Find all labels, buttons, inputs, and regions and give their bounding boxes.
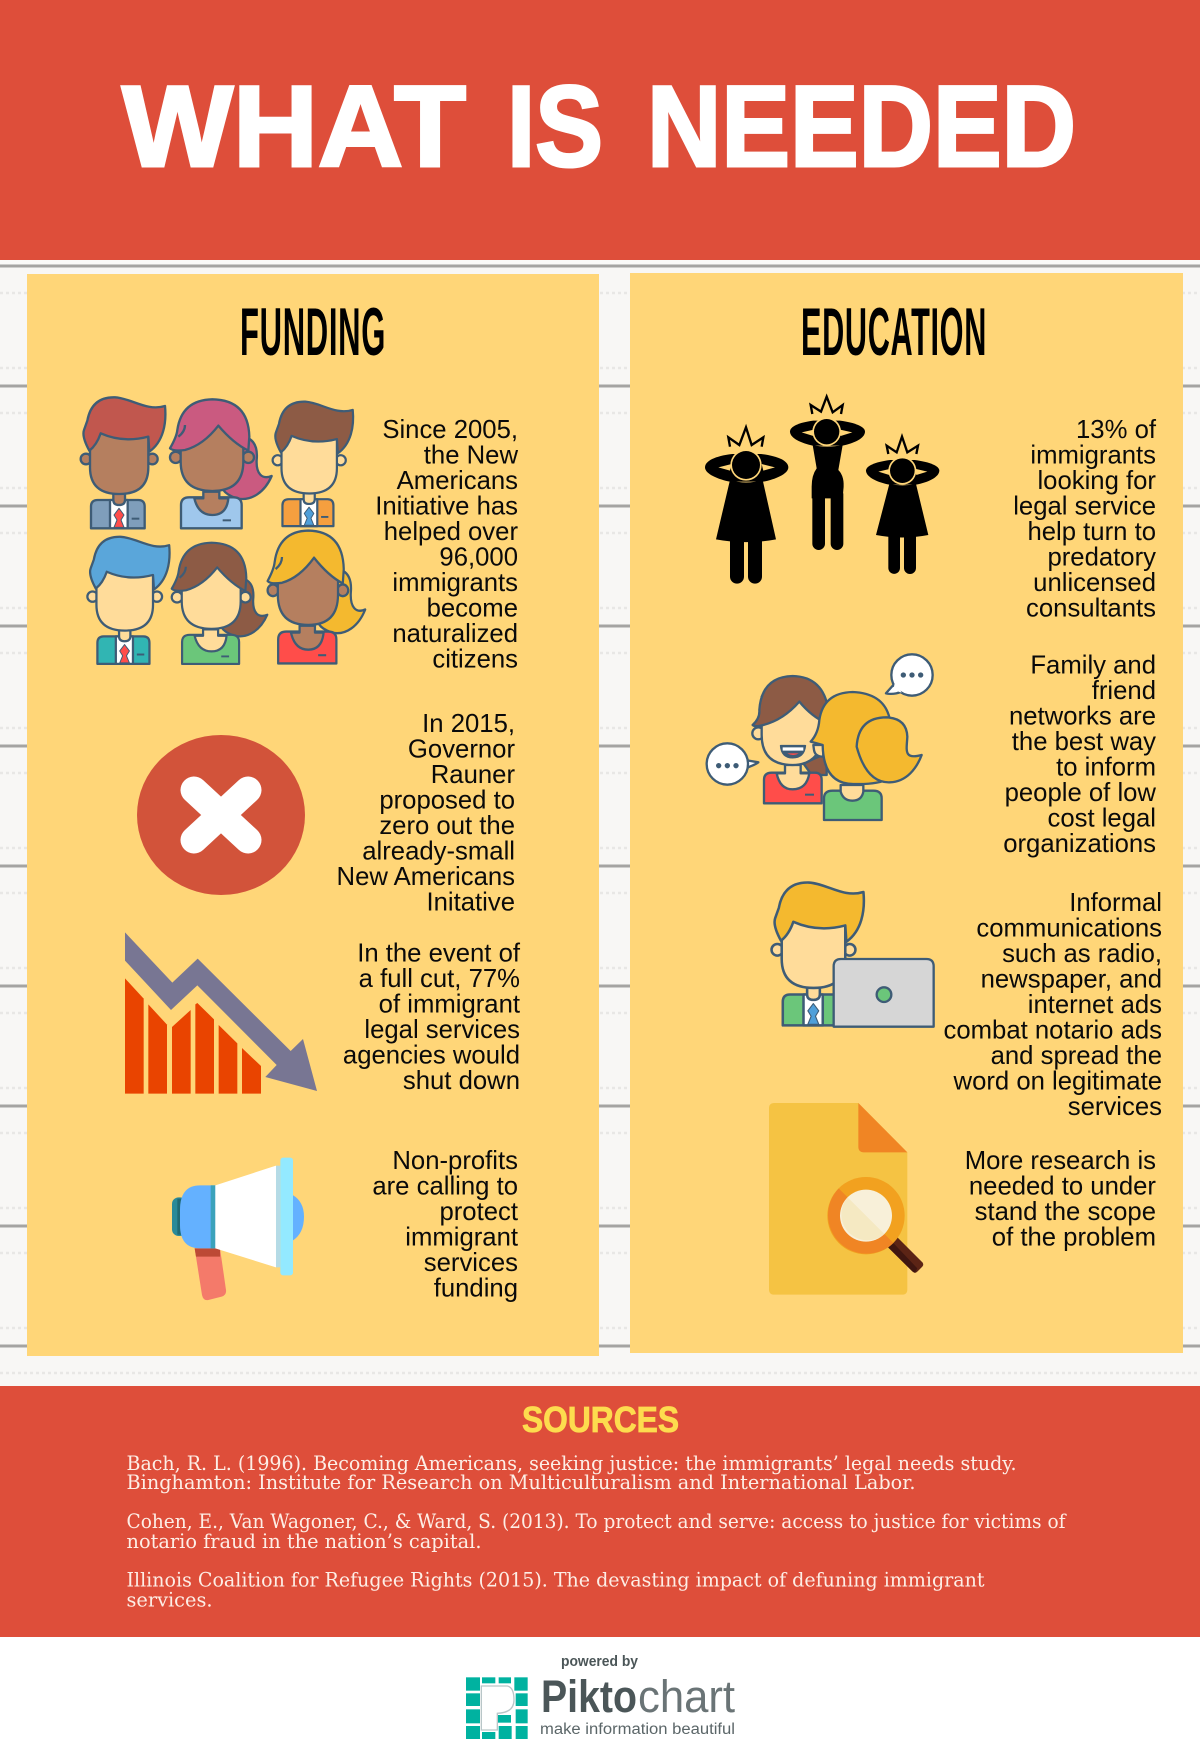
icon: document with magnifying glass — [769, 1103, 923, 1295]
text: non-profits: Non-profits — [392, 1147, 518, 1175]
text: non-profits: protect — [439, 1198, 518, 1226]
text: governor proposal: zero out the — [379, 812, 515, 840]
text: predatory consultants: unlicensed — [1033, 569, 1156, 597]
icon: group of six people — [81, 397, 365, 664]
laptop — [834, 959, 934, 1027]
source: Bach: Binghamton: Institute for Research on Multiculturalism and International Labor. — [126, 1470, 916, 1494]
text: governor proposal: proposed to — [379, 786, 515, 814]
figure: right woman — [866, 437, 939, 574]
text: full cut: shut down — [403, 1067, 520, 1095]
person: woman with brown hair — [172, 543, 267, 664]
panel: funding: FUNDING — [240, 294, 386, 370]
text: predatory consultants: help turn to — [1027, 518, 1156, 546]
text: predatory consultants: consultants — [1026, 594, 1156, 622]
text: naturalized citizens: citizens — [432, 646, 518, 674]
text: naturalized citizens: 96,000 — [439, 544, 518, 572]
footer: powered by piktochart — [0, 1637, 1200, 1757]
logo wordmark: make information beautiful — [540, 1721, 735, 1738]
figure: middle man — [790, 397, 865, 550]
text: predatory consultants: predatory — [1047, 544, 1156, 572]
text: non-profits: immigrant — [405, 1224, 518, 1252]
source: Illinois Coalition: Illinois Coalition for Refugee Rights (2015). The devasting impact of defuning immigrant — [126, 1568, 984, 1592]
text: naturalized citizens: Since 2005, — [382, 416, 518, 444]
text: full cut: a full cut, 77% — [359, 965, 520, 993]
text: governor proposal: already-small — [362, 838, 515, 866]
source: Cohen: Cohen, E., Van Wagoner, C., & Ward, S. (2013). To protect and serve: access to justice for victims of — [126, 1509, 1067, 1533]
text: more research: stand the scope — [975, 1198, 1156, 1226]
source: Bach — [126, 1451, 1016, 1494]
icon: three stressed figures — [705, 397, 939, 584]
source: Illinois Coalition: services. — [126, 1588, 212, 1612]
figure: left woman — [705, 427, 788, 584]
person: laughing woman — [752, 676, 828, 803]
person: man with blue hair — [87, 537, 170, 664]
text: governor proposal: New Americans — [337, 863, 515, 891]
header banner — [0, 0, 1200, 264]
text: informal communications: services — [1068, 1093, 1162, 1121]
text: informal communications: newspaper, and — [981, 966, 1162, 994]
panel: funding — [27, 274, 599, 1356]
person: man with red hair — [81, 397, 165, 528]
text: informal communications: Informal — [1069, 889, 1162, 917]
logo mark — [466, 1677, 528, 1739]
text: informal communications: and spread the — [991, 1042, 1162, 1070]
panel: education — [630, 273, 1183, 1353]
text: family and friend networks: networks are — [1009, 702, 1156, 730]
logo wordmark: Pikto — [541, 1671, 637, 1722]
text: informal communications: internet ads — [1028, 991, 1162, 1019]
text: informal communications: combat notario ads — [944, 1016, 1162, 1044]
icon: falling bar chart with arrow — [125, 932, 317, 1094]
text: naturalized citizens: Initiative has — [375, 492, 518, 520]
title: NEEDED — [647, 63, 1076, 191]
text: full cut: In the event of — [357, 940, 521, 968]
text: governor proposal: Rauner — [431, 761, 515, 789]
text: family and friend networks: cost legal — [1047, 804, 1156, 832]
text: governor proposal: In 2015, — [422, 710, 515, 738]
text: naturalized citizens: become — [427, 594, 518, 622]
text: governor proposal: Governor — [408, 736, 515, 764]
text: family and friend networks: people of low — [1005, 779, 1156, 807]
text: predatory consultants: looking for — [1037, 467, 1156, 495]
text: naturalized citizens: Americans — [397, 467, 518, 495]
title: WHAT — [122, 63, 466, 191]
source: Illinois Coalition — [126, 1568, 984, 1612]
logo wordmark: chart — [638, 1671, 735, 1722]
panel: sources — [0, 1386, 1200, 1637]
text: predatory consultants: 13% of — [1076, 416, 1157, 444]
text: family and friend networks: the best way — [1012, 728, 1156, 756]
heading: sources: SOURCES — [522, 1399, 679, 1440]
icon: man with laptop — [772, 883, 934, 1027]
text: predatory consultants: immigrants — [1030, 442, 1156, 470]
person: woman seen from behind — [811, 692, 922, 820]
text: more research: of the problem — [992, 1224, 1156, 1252]
text: informal communications: such as radio, — [1002, 940, 1162, 968]
text: family and friend networks: Family and — [1030, 652, 1156, 680]
person: woman with pink hair — [170, 399, 272, 528]
speech bubble left — [707, 743, 758, 785]
text: informal communications: communications — [976, 914, 1162, 942]
text: family and friend networks: to inform — [1056, 754, 1156, 782]
text: naturalized citizens: immigrants — [392, 569, 518, 597]
text: non-profits: funding — [434, 1274, 518, 1302]
icon: two people talking with speech bubbles — [707, 654, 933, 820]
icon: megaphone — [172, 1158, 304, 1300]
text: full cut: legal services — [364, 1016, 520, 1044]
text: governor proposal: Initative — [426, 888, 515, 916]
text: predatory consultants: legal service — [1013, 492, 1156, 520]
text: non-profits: services — [424, 1249, 518, 1277]
person: man with brown hair — [273, 402, 353, 526]
source: Cohen: notario fraud in the nation’s capital. — [126, 1529, 482, 1553]
title — [122, 63, 1076, 191]
text: informal communications: word on legitimate — [953, 1068, 1162, 1096]
text: naturalized citizens: helped over — [384, 518, 518, 546]
text: naturalized citizens: the New — [424, 442, 518, 470]
text: full cut: of immigrant — [379, 990, 520, 1018]
text: non-profits: are calling to — [372, 1172, 518, 1200]
text: powered by: powered by — [561, 1653, 639, 1670]
icon: red circle with white x — [137, 735, 305, 895]
source: Bach: Bach, R. L. (1996). Becoming Americans, seeking justice: the immigrants’ legal needs study. — [126, 1451, 1016, 1475]
logo wordmark — [540, 1671, 735, 1738]
speech bubble right — [886, 654, 933, 696]
text: more research: More research is — [965, 1147, 1156, 1175]
text: family and friend networks: friend — [1092, 677, 1156, 705]
source: Cohen — [126, 1509, 1067, 1553]
text: more research: needed to under — [969, 1172, 1156, 1200]
text: family and friend networks: organizations — [1003, 830, 1156, 858]
text: naturalized citizens: naturalized — [392, 620, 518, 648]
person: woman with yellow hair — [268, 531, 365, 663]
text: full cut: agencies would — [343, 1042, 520, 1070]
title: IS — [507, 63, 603, 191]
